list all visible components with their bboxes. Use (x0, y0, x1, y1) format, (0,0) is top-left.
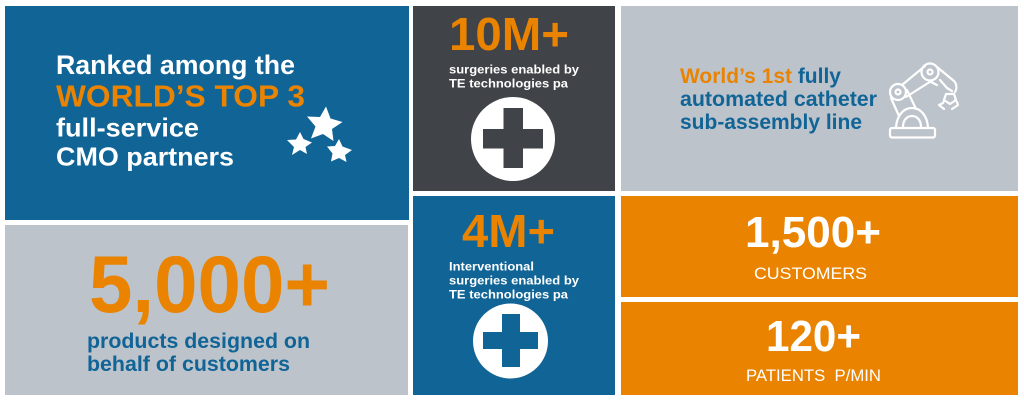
text: products designed on behalf of customers: products designed on (87, 330, 310, 353)
text: interventional surgeries enabled by TE technologies pa: TE technologies pa (449, 288, 568, 302)
icon: medical cross (471, 97, 555, 181)
heading: ranked among the world's top 3: CMO partners (56, 142, 234, 172)
panel: 10M+ surgeries (413, 6, 615, 191)
heading: ranked among the world's top 3: Ranked among the (56, 50, 295, 80)
text: products designed on behalf of customers: behalf of customers (87, 353, 290, 376)
panel: 120+ patients per minute (621, 302, 1018, 395)
icon: medical cross (473, 304, 548, 378)
heading: ranked among the world's top 3: WORLD’S TOP 3 (56, 78, 305, 114)
icon: three stars (287, 106, 352, 162)
panel: world's top 3 (5, 6, 409, 220)
stat: 4M+: 4M+ (462, 205, 555, 257)
text: surgeries enabled by TE technologies pa: TE technologies pa (449, 76, 568, 90)
text: products designed on behalf of customers (87, 330, 310, 376)
text: interventional surgeries enabled by TE technologies pa: Interventional (449, 260, 534, 274)
heading: ranked among the world's top 3: full-service (56, 112, 199, 142)
panel: 1,500+ customers (621, 196, 1018, 297)
panel: 5,000+ products (5, 225, 408, 395)
text: world's 1st fully automated catheter sub-assembly line: World’s 1st fully (680, 65, 841, 88)
stat: 1,500+: 1,500+ (745, 208, 881, 257)
label: patients p/min: PATIENTS P/MIN (746, 367, 881, 385)
text: world's 1st fully automated catheter sub-assembly line (680, 65, 877, 134)
text: world's 1st fully automated catheter sub-assembly line: automated catheter (680, 88, 877, 111)
stat: 10M+: 10M+ (449, 8, 569, 60)
text: interventional surgeries enabled by TE technologies pa (449, 260, 579, 302)
panel: automated catheter line (621, 6, 1018, 191)
text: interventional surgeries enabled by TE technologies pa: surgeries enabled by (449, 274, 579, 288)
panel: 4M+ interventional surgeries (413, 196, 615, 395)
stat: 5,000+: 5,000+ (89, 240, 330, 330)
stat: 120+: 120+ (766, 312, 861, 361)
text: world's 1st fully automated catheter sub-assembly line: sub-assembly line (680, 111, 862, 134)
heading: ranked among the world's top 3 (56, 50, 305, 172)
label: customers: CUSTOMERS (754, 264, 867, 283)
icon: robot arm (890, 64, 958, 138)
text: surgeries enabled by TE technologies pa (449, 62, 579, 90)
text: surgeries enabled by TE technologies pa: surgeries enabled by (449, 62, 579, 76)
